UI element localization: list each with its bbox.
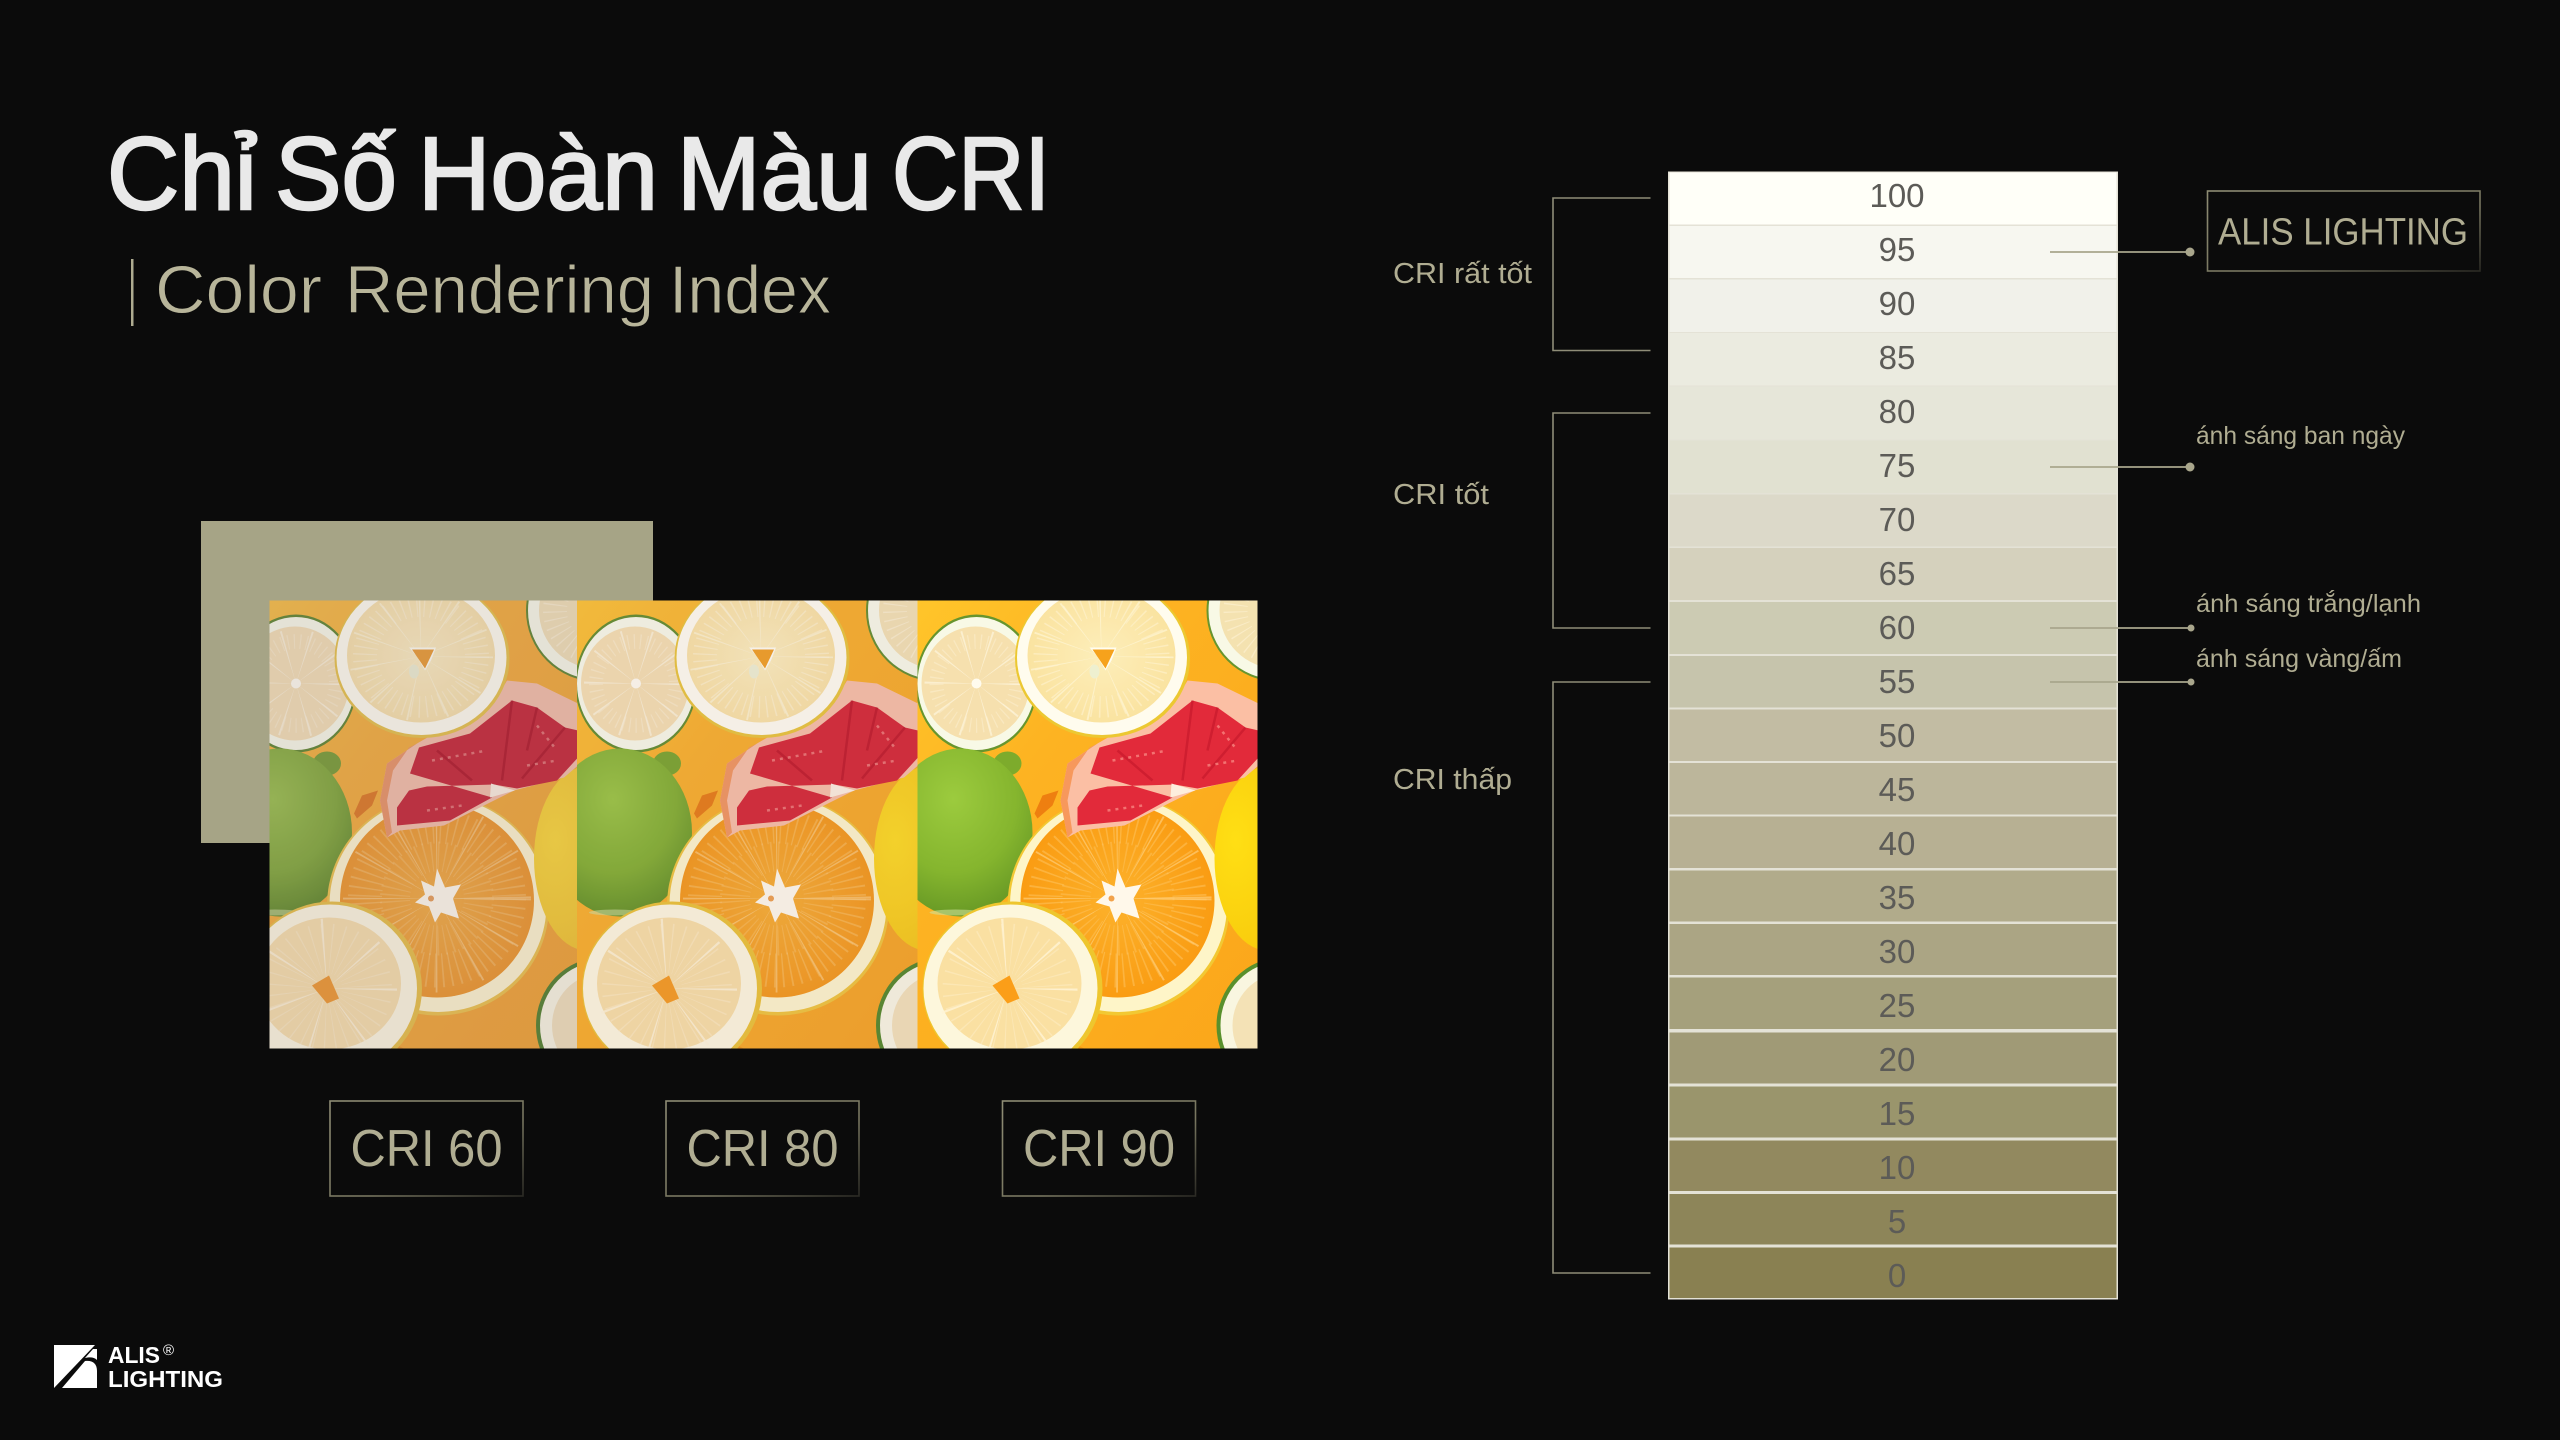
subtitle: Rendering <box>345 252 654 328</box>
title: Hoàn <box>418 116 658 231</box>
scale numbers: 85 <box>1879 339 1915 376</box>
bracket: CRI tốt <box>1393 413 1650 628</box>
callout: ánh sáng vàng/ấm <box>2050 645 2402 686</box>
label: CRI 80 <box>666 1101 859 1196</box>
callout: ánh sáng vàng/ấm: ánh sáng vàng/ấm <box>2196 645 2402 673</box>
bracket: CRI rất tốt: CRI rất tốt <box>1393 258 1532 290</box>
scale numbers: 70 <box>1879 501 1915 538</box>
scale numbers: 20 <box>1879 1041 1915 1078</box>
callout: ánh sáng ban ngày <box>2050 422 2405 472</box>
scale numbers: 15 <box>1879 1095 1915 1132</box>
label: CRI 60: CRI 60 <box>350 1120 502 1178</box>
scale numbers: 65 <box>1879 555 1915 592</box>
subtitle <box>131 252 831 328</box>
scale numbers: 0 <box>1888 1257 1906 1294</box>
scale numbers: 95 <box>1879 231 1915 268</box>
logo: ALIS LIGHTING <box>54 1342 223 1392</box>
scale numbers: 90 <box>1879 285 1915 322</box>
scale numbers: 30 <box>1879 933 1915 970</box>
scale numbers <box>1869 177 1925 1294</box>
scale numbers: 25 <box>1879 987 1915 1024</box>
callout: ALIS LIGHTING <box>2050 191 2480 271</box>
title: Số <box>275 116 397 231</box>
scale numbers: 40 <box>1879 825 1915 862</box>
photo: CRI 90 <box>888 540 1348 1094</box>
bracket: CRI thấp: CRI thấp <box>1393 764 1512 796</box>
tan backdrop rectangle <box>201 521 653 843</box>
scale numbers: 100 <box>1869 177 1925 214</box>
subtitle: Color <box>155 252 322 328</box>
CRI scale chart <box>1668 172 2118 1300</box>
logo: ALIS LIGHTING: ® <box>163 1342 174 1359</box>
icon: logo mark <box>54 1345 97 1388</box>
scale numbers: 50 <box>1879 717 1915 754</box>
scale numbers: 75 <box>1879 447 1915 484</box>
logo: ALIS LIGHTING: LIGHTING <box>108 1366 223 1392</box>
scale numbers: 55 <box>1879 663 1915 700</box>
callout: ánh sáng trắng/lạnh: ánh sáng trắng/lạnh <box>2196 589 2421 618</box>
scale numbers: 35 <box>1879 879 1915 916</box>
photo: CRI 80 <box>577 600 918 1048</box>
bracket: CRI rất tốt <box>1393 198 1650 350</box>
photo comparison panel <box>270 600 1258 1048</box>
callout: ánh sáng trắng/lạnh <box>2050 589 2421 632</box>
callout: ALIS LIGHTING: ALIS LIGHTING <box>2218 212 2468 254</box>
photo: CRI 60 <box>270 600 577 1048</box>
label: CRI 90 <box>1002 1101 1196 1196</box>
scale numbers: 5 <box>1888 1203 1906 1240</box>
callout: ánh sáng ban ngày: ánh sáng ban ngày <box>2196 422 2405 450</box>
scale numbers: 10 <box>1879 1149 1915 1186</box>
label: CRI 60 <box>330 1101 523 1196</box>
logo: ALIS LIGHTING: ALIS <box>108 1342 160 1368</box>
title <box>107 116 1050 231</box>
title: CRI <box>892 116 1050 231</box>
title: Màu <box>677 116 872 231</box>
subtitle: Index <box>669 252 831 328</box>
label: CRI 90: CRI 90 <box>1023 1120 1175 1178</box>
bracket: CRI tốt: CRI tốt <box>1393 479 1489 511</box>
title: Chỉ <box>107 116 257 231</box>
scale numbers: 80 <box>1879 393 1915 430</box>
scale numbers: 45 <box>1879 771 1915 808</box>
scale numbers: 60 <box>1879 609 1915 646</box>
bracket: CRI thấp <box>1393 682 1650 1273</box>
label: CRI 80: CRI 80 <box>686 1120 838 1178</box>
